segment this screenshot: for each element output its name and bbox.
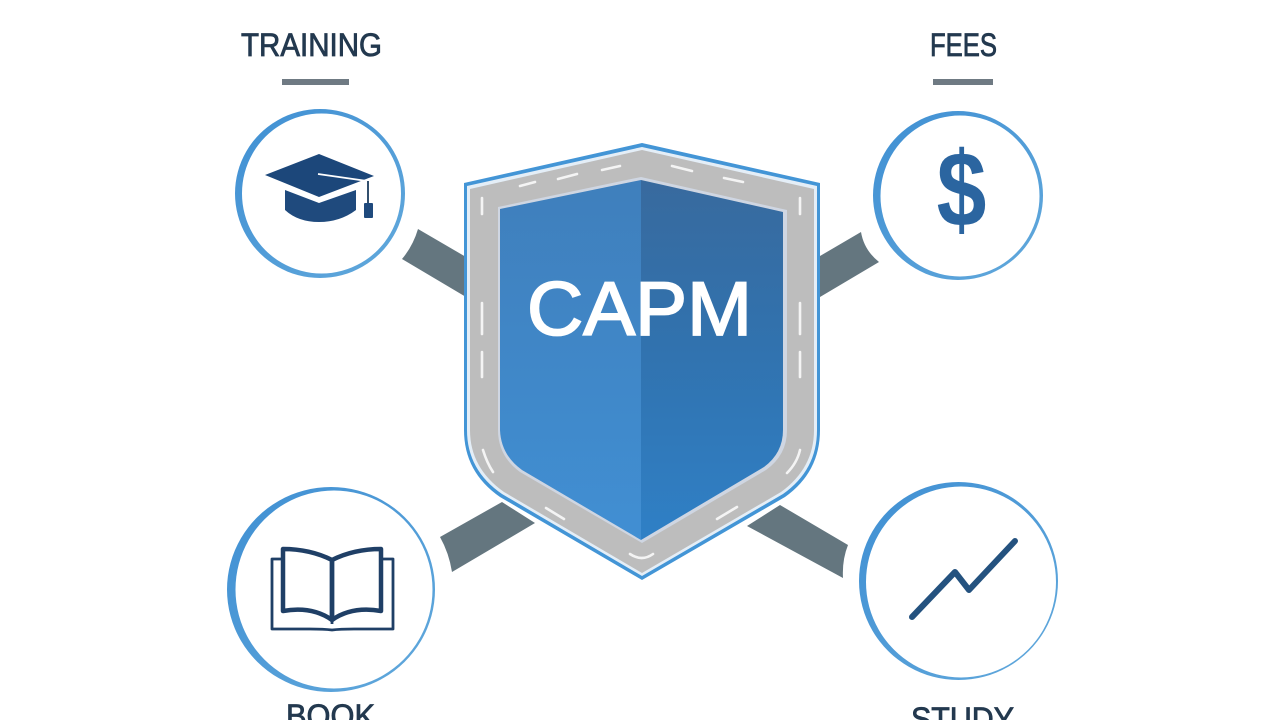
connector: fees to shield — [820, 232, 879, 297]
heading: training: TRAINING — [241, 27, 382, 63]
panel: fees — [873, 27, 1043, 280]
shield right face — [641, 180, 783, 540]
icon: dollar sign: $ — [937, 129, 986, 249]
connector: book to shield — [440, 502, 535, 572]
icon: graduation cap — [265, 154, 374, 222]
shield outer blue edge — [464, 143, 820, 580]
ring: fees — [873, 111, 1043, 280]
underline: training — [282, 79, 349, 85]
shield: CAPM — [464, 143, 820, 580]
connector: training to shield — [402, 229, 466, 297]
connector: study to shield — [747, 505, 848, 578]
shield title: CAPM — [527, 267, 752, 352]
inner light edge — [498, 177, 787, 543]
shield white edge line — [467, 147, 817, 576]
panel: training — [235, 27, 405, 278]
icon: open book — [272, 549, 393, 630]
road band — [470, 150, 814, 573]
heading: fees: FEES — [930, 27, 997, 63]
ring: study — [859, 482, 1058, 680]
ring: book — [227, 487, 435, 692]
ring: training — [235, 109, 405, 278]
road dashes — [482, 166, 800, 558]
shield left face — [500, 180, 641, 540]
panel: book — [227, 487, 435, 720]
underline: fees — [933, 79, 993, 85]
panel: study — [859, 482, 1058, 720]
icon: trend line — [912, 541, 1015, 617]
